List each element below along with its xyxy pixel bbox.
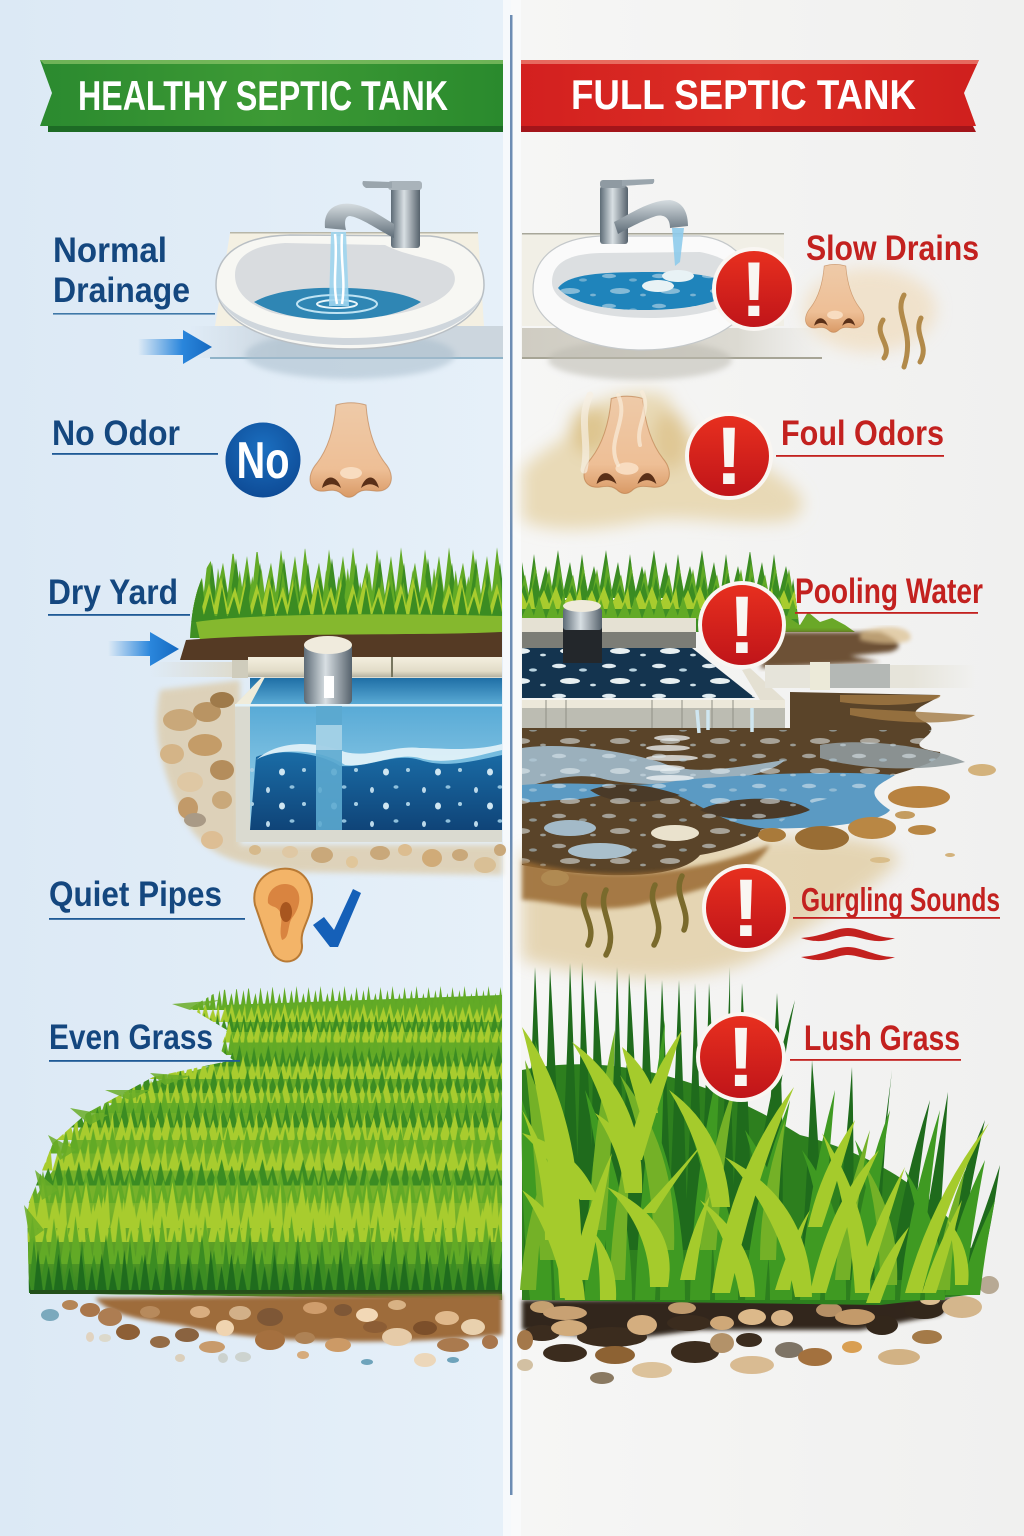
counter xyxy=(522,234,784,326)
alert: pooling water xyxy=(700,580,784,671)
reflections xyxy=(645,735,698,781)
pool base xyxy=(522,692,940,875)
wet soil xyxy=(522,836,900,978)
icon: check mark xyxy=(313,889,361,947)
tan streaks xyxy=(840,695,975,722)
badge: no: No xyxy=(236,432,290,490)
icon: ear xyxy=(254,869,312,962)
icon: foul nose with fumes xyxy=(584,392,669,494)
icon: clean nose xyxy=(310,403,391,497)
alert: pooling water: ! xyxy=(728,580,756,671)
right grass strip xyxy=(780,612,855,632)
illustration: healthy sink xyxy=(190,181,503,379)
badge: no xyxy=(226,422,300,498)
basin xyxy=(216,235,484,349)
faucet xyxy=(391,186,420,248)
mud patches xyxy=(888,786,950,808)
icon: sound waves xyxy=(801,928,895,960)
label: quiet pipes: Quiet Pipes xyxy=(49,875,222,914)
lawn blades xyxy=(27,986,502,1300)
tank cap xyxy=(563,625,602,663)
tank cap xyxy=(304,644,352,704)
faucet xyxy=(600,186,628,244)
outlet pipe xyxy=(765,665,975,688)
stream xyxy=(329,232,349,306)
alert: lush grass xyxy=(698,1010,784,1104)
alert: gurgling sounds xyxy=(704,863,788,954)
background: full side xyxy=(511,0,1024,1536)
center divider xyxy=(510,15,512,1495)
icon: small nose with fumes xyxy=(804,264,936,367)
arrow: drainage xyxy=(138,330,212,364)
illustration: lush overgrown grass xyxy=(517,962,1000,1384)
soil base xyxy=(522,1298,960,1340)
alert: lush grass: ! xyxy=(727,1010,755,1104)
tank frame xyxy=(522,618,696,632)
brown lower band xyxy=(522,845,770,908)
blue-grey water xyxy=(522,746,785,788)
label: pooling water: Pooling Water xyxy=(795,572,983,611)
alert: foul odors xyxy=(687,411,771,502)
dark spikes xyxy=(524,962,1000,1290)
gravel xyxy=(517,1276,999,1384)
label: dry yard: Dry Yard xyxy=(48,573,178,612)
label: even grass: Even Grass xyxy=(49,1018,213,1057)
tank shell xyxy=(235,677,502,842)
background: healthy side xyxy=(0,0,511,1536)
grass mass xyxy=(522,1064,975,1305)
label: foul odors: Foul Odors xyxy=(781,414,944,453)
lime-green blades xyxy=(520,1030,965,1290)
illustration: full sink xyxy=(522,179,830,380)
inner pipe xyxy=(316,706,342,830)
grass light band xyxy=(196,614,502,640)
gravel xyxy=(41,1294,502,1367)
label: normal drainage: Drainage xyxy=(53,271,190,310)
basin xyxy=(533,236,752,350)
alert: slow drains xyxy=(714,245,794,333)
label: normal drainage xyxy=(53,231,215,315)
lawn edge blades xyxy=(24,1000,220,1240)
alert: foul odors: ! xyxy=(715,411,743,502)
water xyxy=(254,288,421,320)
yard grass xyxy=(190,548,502,638)
soil strip xyxy=(760,632,899,668)
bright blades xyxy=(522,1027,989,1303)
heading banner: healthy xyxy=(40,60,503,132)
label: normal drainage: Normal xyxy=(53,231,167,270)
label: no odor: No Odor xyxy=(52,414,180,453)
dark soil strip xyxy=(180,632,502,660)
drips xyxy=(697,708,752,733)
mid blades xyxy=(522,1020,995,1300)
alert: gurgling sounds: ! xyxy=(732,863,760,954)
illustration: pooling tank xyxy=(0,548,1024,978)
heading text: HEALTHY SEPTIC TANK xyxy=(78,72,448,119)
soil xyxy=(157,680,506,875)
deep water xyxy=(250,744,502,830)
heading banner: full xyxy=(521,60,979,132)
label: lush grass: Lush Grass xyxy=(804,1019,960,1058)
label: slow drains: Slow Drains xyxy=(806,229,979,268)
illustration: healthy tank xyxy=(154,548,506,878)
overflowing water xyxy=(558,272,735,310)
counter xyxy=(215,233,484,326)
icon: fumes xyxy=(583,876,686,955)
yard grass xyxy=(522,550,799,632)
pipe xyxy=(150,662,240,677)
illustration: even lawn xyxy=(24,986,506,1367)
arrow: dry yard xyxy=(108,632,179,666)
heading text: FULL SEPTIC TANK xyxy=(571,71,916,118)
alert: slow drains: ! xyxy=(741,245,767,333)
soil stain: foul odors xyxy=(522,392,803,529)
